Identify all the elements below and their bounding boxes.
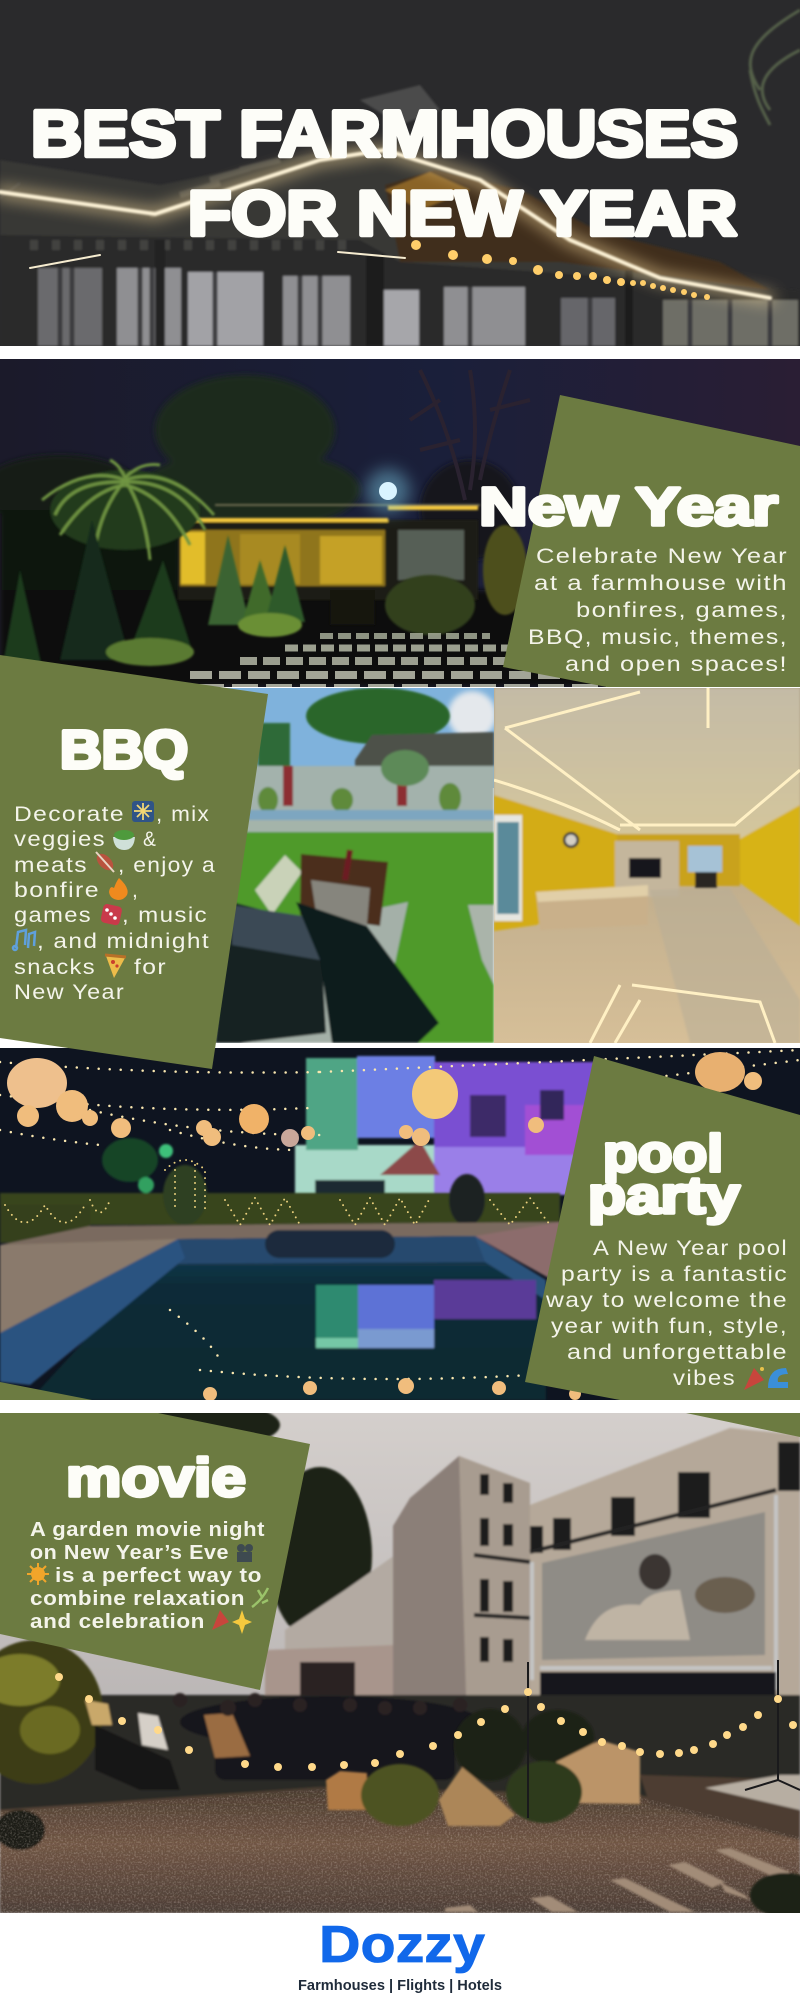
- house: [295, 1056, 605, 1198]
- text block: bbq description: &: [143, 828, 157, 851]
- screen: [542, 1512, 765, 1660]
- left bush: [0, 1640, 103, 1784]
- icon: sparkles: [232, 1610, 252, 1634]
- icon: dice: [100, 903, 123, 926]
- corner accent: pool: [0, 1382, 92, 1400]
- icon: meat: [94, 851, 116, 873]
- icon: fireworks: [132, 801, 154, 822]
- back buildings: [284, 1557, 394, 1650]
- photo: new year farmhouse garden: [0, 359, 800, 687]
- panel: bbq: [0, 655, 268, 1069]
- text block: bbq description: [14, 803, 216, 1004]
- building: [178, 505, 480, 625]
- text block: bbq description: veggies: [14, 828, 106, 851]
- text block: pool party description: party is a fantastic: [561, 1263, 788, 1286]
- pool water: [40, 1261, 546, 1400]
- icon: pizza: [105, 955, 126, 978]
- text block: pool party description: way to welcome the: [545, 1289, 788, 1312]
- text block: pool party description: year with fun, style,: [551, 1315, 788, 1338]
- stepping stones: [610, 1878, 695, 1912]
- gravel texture: [0, 1785, 800, 1913]
- title: FOR NEW YEAR: [188, 179, 737, 249]
- text block: new year description: and open spaces!: [565, 653, 788, 676]
- text block: bbq description: , music: [122, 904, 208, 927]
- corner accent: [686, 1413, 800, 1437]
- text block: movie description: and celebration: [30, 1611, 205, 1633]
- photo: bbq on lawn: [216, 688, 494, 1043]
- icon: salad: [113, 830, 135, 850]
- text block: new year description: bonfires, games,: [576, 599, 788, 622]
- icon: movie camera: [237, 1544, 253, 1562]
- icon: party popper: [212, 1610, 229, 1630]
- photo: pool party: [0, 1048, 800, 1401]
- icon: fire: [109, 878, 128, 900]
- icon: party popper: [744, 1367, 764, 1390]
- text block: pool party description: and unforgettable: [567, 1341, 788, 1364]
- heading: pool party: party: [588, 1167, 740, 1225]
- icon: sun: [27, 1563, 49, 1585]
- text block: movie description: combine relaxation: [30, 1588, 245, 1610]
- text block: movie description: [30, 1519, 265, 1633]
- icon: wave: [768, 1368, 788, 1388]
- text block: new year description: Celebrate New Year: [536, 545, 788, 568]
- text block: new year description: [528, 545, 788, 676]
- text block: pool party description: vibes: [673, 1367, 736, 1390]
- footer logo: Dozzy: Dozzy: [319, 1916, 485, 1974]
- hedge and deck: [0, 1138, 560, 1400]
- rocks and shrubs: [454, 1709, 526, 1781]
- hedge fairy lights: [5, 1160, 550, 1225]
- tagline: Farmhouses | Flights | Hotels: [298, 1977, 502, 1994]
- text block: bbq description: ,: [132, 879, 139, 902]
- icon: leaves: [252, 1588, 268, 1607]
- title: BEST FARMHOUSES: [31, 97, 738, 170]
- heading: bbq: BBQ: [60, 720, 188, 780]
- panel: pool party: [525, 1056, 800, 1400]
- text block: pool party description: A New Year pool: [593, 1237, 788, 1260]
- text block: new year description: at a farmhouse with: [534, 572, 788, 595]
- heading: movie: movie: [66, 1448, 246, 1508]
- text block: bbq description: Decorate: [14, 803, 125, 826]
- text block: bbq description: New Year: [14, 981, 125, 1004]
- panel: movie: [0, 1413, 800, 1690]
- text block: bbq description: for: [134, 956, 167, 979]
- text block: movie description: A garden movie night: [30, 1519, 265, 1541]
- text block: pool party description: [545, 1237, 788, 1390]
- ground: [0, 1695, 800, 1815]
- text block: bbq description: , enjoy a: [118, 854, 216, 877]
- trees and palm: [0, 460, 527, 680]
- festoon bulbs: [55, 1673, 797, 1771]
- text block: new year description: BBQ, music, themes,: [528, 626, 788, 649]
- title: [31, 97, 738, 249]
- main building: [393, 1456, 466, 1695]
- lanterns: [7, 1052, 762, 1401]
- text block: movie description: on New Year’s Eve: [30, 1542, 229, 1564]
- heading: new year: New Year: [479, 477, 778, 537]
- panel: new year: [479, 395, 800, 687]
- hero photo: farmhouse at night: [0, 0, 800, 346]
- photo: garden movie night: [0, 1397, 800, 1917]
- text block: bbq description: , mix: [156, 803, 210, 826]
- string lights: [0, 1050, 800, 1379]
- heading: pool party: pool: [603, 1125, 723, 1183]
- audience: [180, 1696, 472, 1737]
- text block: bbq description: meats: [14, 854, 88, 877]
- footer logo: Dozzy: [298, 1916, 502, 1994]
- paving stones: [190, 633, 607, 687]
- text block: movie description: is a perfect way to: [55, 1565, 262, 1587]
- text block: bbq description: games: [14, 904, 92, 927]
- heading: pool party: [588, 1125, 740, 1225]
- text block: bbq description: snacks: [14, 956, 96, 979]
- tree: [158, 1413, 282, 1436]
- photo: yellow living room: [494, 688, 800, 1043]
- icon: music notes: [13, 930, 35, 950]
- text block: bbq description: , and midnight: [37, 930, 210, 953]
- text block: bbq description: bonfire: [14, 879, 100, 902]
